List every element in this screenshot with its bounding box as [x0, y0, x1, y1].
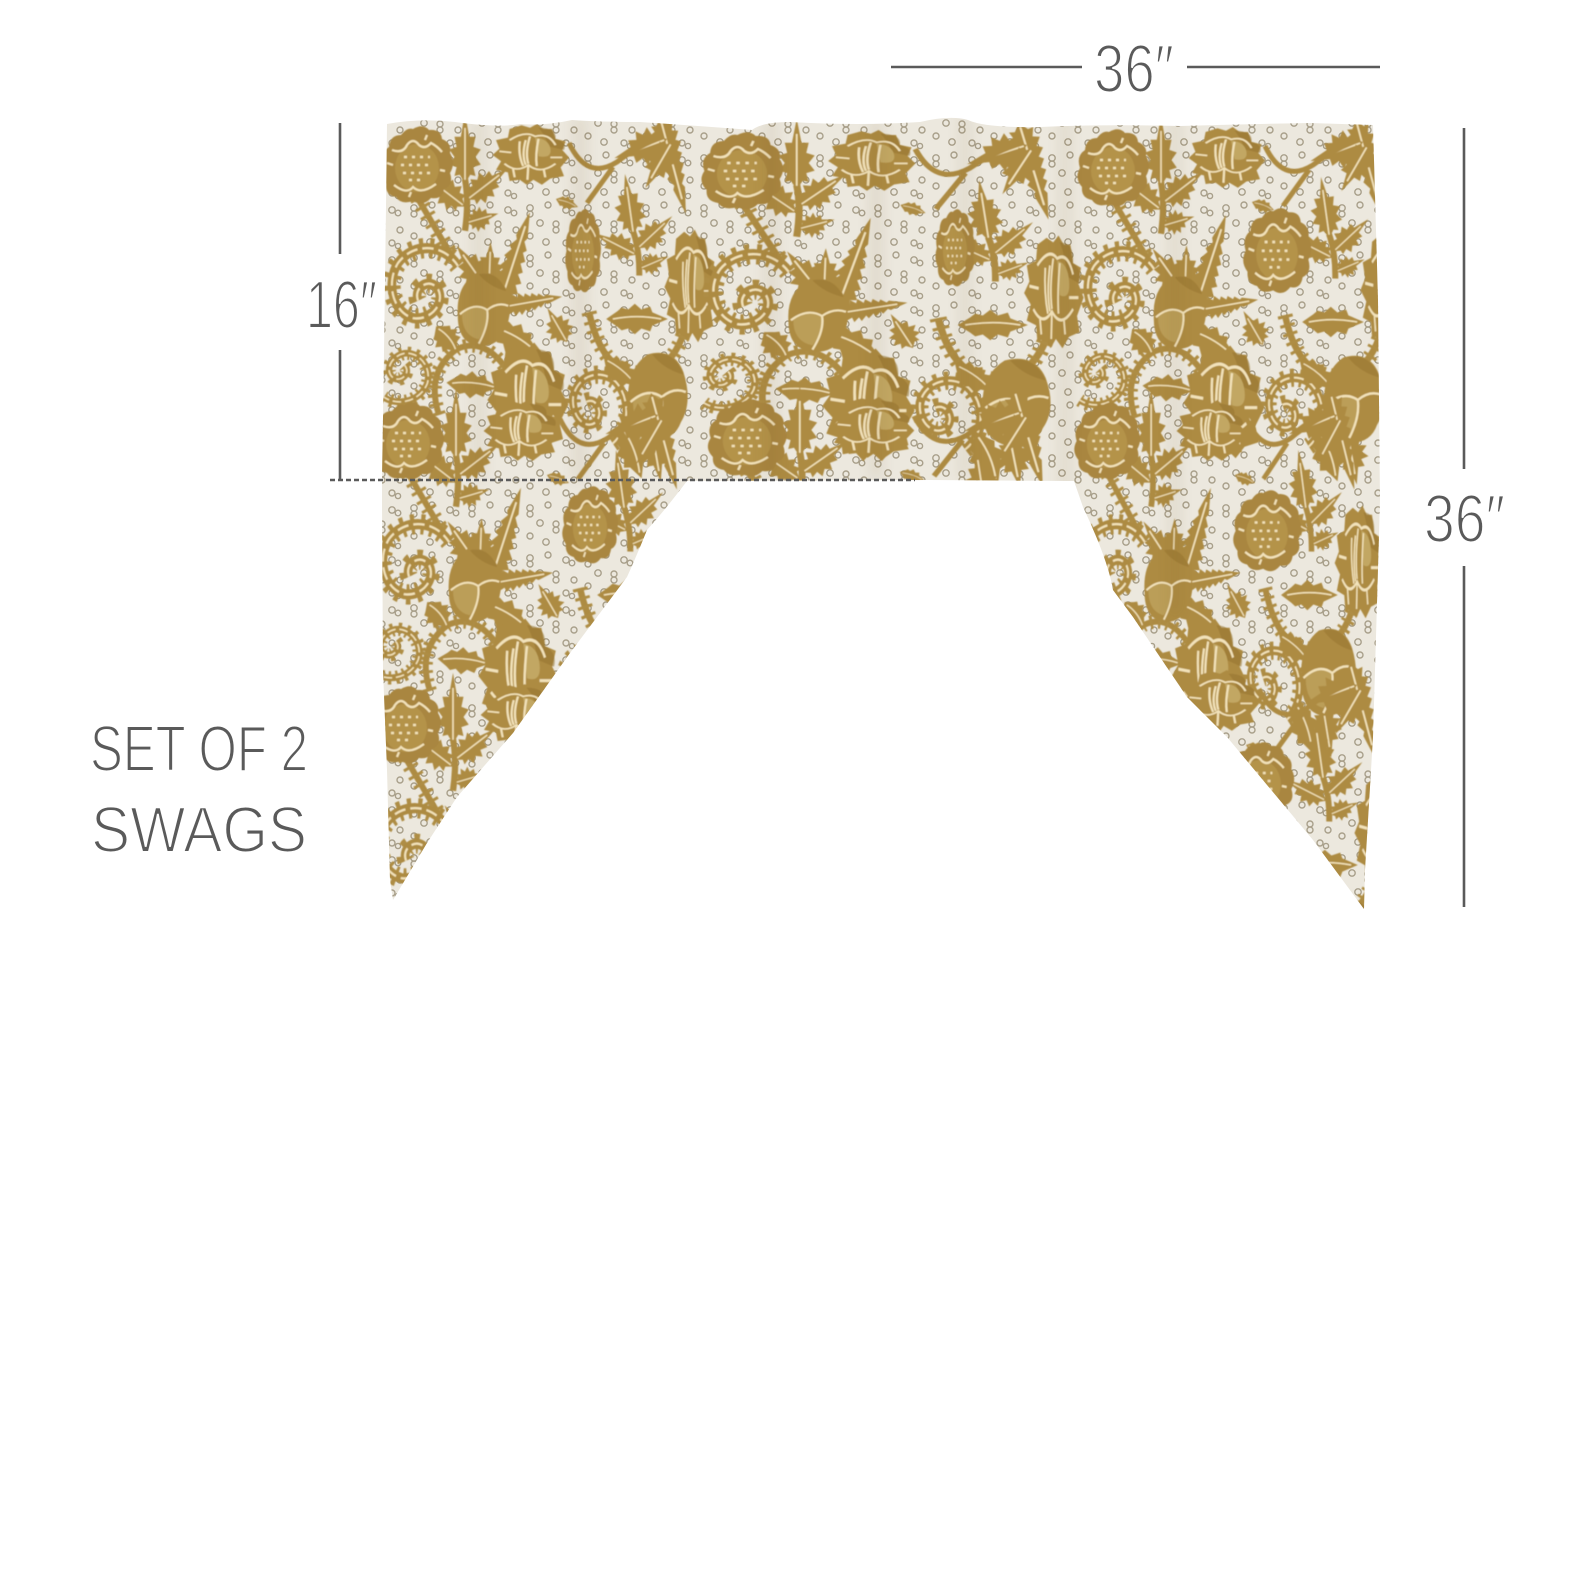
length dimension: 36 inches: 36″ — [1424, 481, 1505, 557]
caption: set of 2 swags: SWAGS — [91, 793, 307, 866]
width dimension: 36 inches: 36″ — [1094, 31, 1174, 107]
caption: set of 2 swags: SET OF 2 — [90, 712, 308, 785]
drop dimension: 16 inches: 16″ — [306, 267, 377, 343]
fabric fold shading — [474, 115, 1180, 615]
floral print pattern — [382, 122, 1380, 909]
panel: swag curtain photo — [382, 118, 1380, 909]
dashed drop guide line — [330, 479, 915, 481]
caption: set of 2 swags — [90, 712, 308, 866]
